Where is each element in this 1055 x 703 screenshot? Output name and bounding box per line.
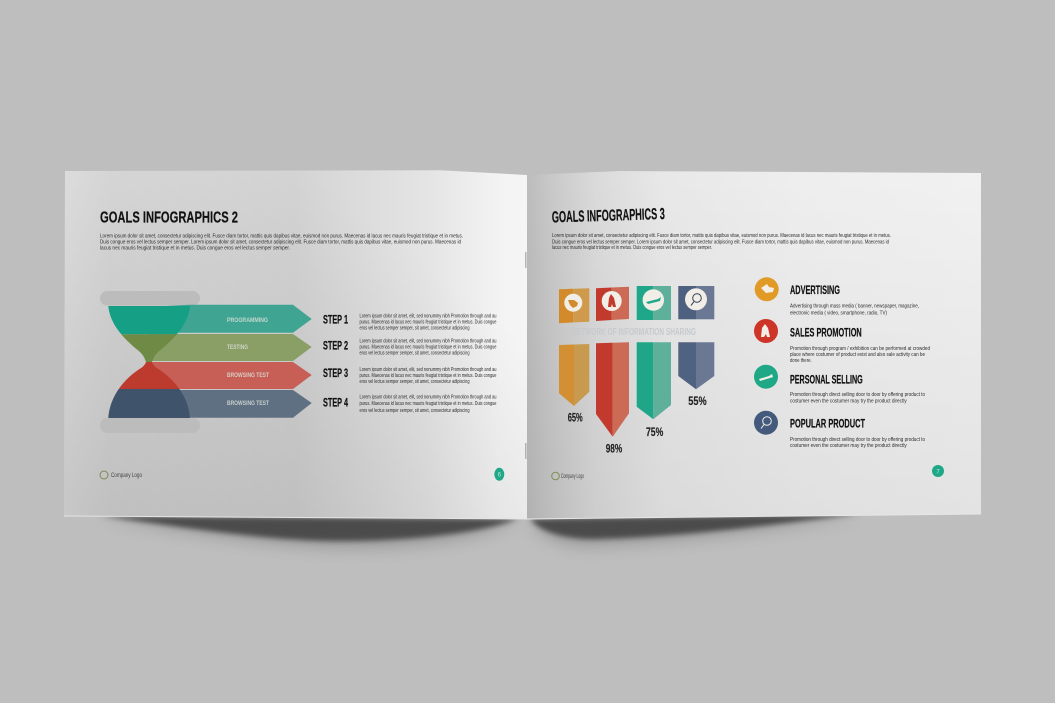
list: personal selling: costumer even the costumer may try the product directly [790, 399, 907, 405]
ribbon 75% green: 75% [646, 427, 663, 439]
step 2: Lorem ipsum dolor sit amet, elit, sed nonummy nibh Promotion through and au [360, 338, 496, 344]
step 3 [323, 367, 496, 385]
list: sales promotion: done there. [790, 358, 812, 364]
list: personal selling: PERSONAL SELLING [790, 374, 863, 386]
chart: hourglass with arrows [100, 291, 312, 433]
intro text [100, 234, 463, 252]
intro text: Lorem ipsum dolor sit amet, consectetur adipiscing elit. Fusce diam tortor, mattis quis dapibus vitae, euismod non purus. Maecenas id lacus nec mauris feugiat tristique et in metus. [100, 234, 463, 240]
step 1 [323, 314, 496, 332]
left page sheet [64, 170, 527, 519]
heading: goals infographics 2: GOALS INFOGRAPHICS 2 [100, 210, 238, 227]
icon: advertising [755, 277, 779, 301]
list: sales promotion [754, 319, 930, 364]
step 3: STEP 3 [323, 368, 348, 380]
icon: popular product [754, 411, 778, 435]
page number 6: 6 [498, 472, 502, 478]
arrow: browsing test red: BROWSING TEST [227, 372, 269, 379]
intro text [552, 233, 891, 251]
step 4: Lorem ipsum dolor sit amet, elit, sed nonummy nibh Promotion through and au [360, 394, 496, 400]
panel: left page [64, 170, 527, 519]
hourglass bottom cap [100, 418, 200, 433]
list: personal selling [754, 365, 925, 405]
company logo right: Company Logo [561, 474, 584, 480]
page number 6 [494, 468, 504, 481]
page shadows [100, 514, 860, 548]
step 2 [323, 338, 496, 356]
intro text: Duis congue eros vel lectus semper semper. Lorem ipsum dolor sit amet, consectetur adipiscing elit. Fusce diam tortor, mattis quis dapibus vitae, euismod non purus. Maecenas id [552, 240, 889, 246]
step 3: eros vel lectus semper semper, sit amet, consectetur adipiscing [360, 379, 470, 385]
ribbon 98% red: 98% [606, 443, 622, 455]
step 4 [323, 394, 496, 414]
page number 7: 7 [936, 470, 940, 476]
arrow: programming [149, 305, 312, 333]
step 4: STEP 4 [323, 398, 348, 410]
list: sales promotion: place where costumer of product exist and also sale activity can be [790, 352, 925, 358]
ribbon 55% blue [678, 342, 714, 408]
page number 7 [932, 465, 944, 477]
intro text: lacus nec mauris feugiat tristique et in metus. Duis congue eros vel lectus semper semper. [100, 246, 290, 252]
step 2: STEP 2 [323, 340, 348, 352]
arrow: testing: TESTING [227, 344, 248, 351]
list: advertising [755, 277, 919, 317]
list: personal selling: Promotion through direct selling door to door by offering product to [790, 392, 925, 398]
icon tile orange [559, 288, 589, 323]
panel: right page [525, 171, 981, 519]
step 3: Lorem ipsum dolor sit amet, elit, sed nonummy nibh Promotion through and au [360, 367, 496, 373]
icon tile blue [678, 286, 714, 319]
step 2: eros vel lectus semper semper, sit amet, consectetur adipiscing [360, 350, 470, 356]
intro text: Duis congue eros vel lectus semper semper. Lorem ipsum dolor sit amet, consectetur adipiscing elit. Fusce diam tortor, mattis quis dapibus vitae, euismod non purus. Maecenas id [100, 240, 461, 246]
arrow: browsing test red [149, 362, 312, 389]
hourglass body [108, 306, 190, 418]
list: sales promotion: Promotion through program / exhibition can be performed at crowded [790, 346, 930, 352]
list: popular product: costumer even the costumer may try the product directly [790, 443, 907, 449]
network caption: NETWORK OF INFORMATION SHARING [572, 326, 696, 338]
step 4: purus. Maecenas id lacus nec mauris feugiat tristique et in metus. Duis congue [360, 401, 496, 407]
company logo left [100, 471, 142, 479]
ribbon 98% red [596, 342, 629, 455]
arrow: browsing test blue: BROWSING TEST [227, 400, 269, 407]
list: popular product [754, 411, 925, 449]
list: popular product: POPULAR PRODUCT [790, 419, 865, 431]
arrow: browsing test blue [149, 390, 312, 418]
icon tile red [596, 287, 629, 321]
company logo right [552, 472, 584, 480]
step 3: purus. Maecenas id lacus nec mauris feugiat tristique et in metus. Duis congue [360, 373, 496, 379]
company logo left: Company Logo [111, 473, 142, 479]
spine staple marks [525, 252, 526, 459]
list: sales promotion: SALES PROMOTION [790, 328, 862, 340]
hourglass top cap [100, 291, 200, 306]
arrow: programming: PROGRAMMING [227, 317, 268, 324]
icon: personal selling [754, 365, 778, 389]
step 1: Lorem ipsum dolor sit amet, elit, sed nonummy nibh Promotion through and au [360, 314, 496, 320]
list: advertising: ADVERTISING [790, 285, 840, 297]
step 1: purus. Maecenas id lacus nec mauris feugiat tristique et in metus. Duis congue [360, 320, 496, 326]
step labels and descriptions [323, 314, 496, 414]
heading: goals infographics 3: GOALS INFOGRAPHICS 3 [552, 206, 665, 226]
arrow: testing [149, 334, 312, 361]
icon tile green [637, 286, 671, 320]
step 4: eros vel lectus semper semper, sit amet, consectetur adipiscing [360, 408, 470, 414]
step 2: purus. Maecenas id lacus nec mauris feugiat tristique et in metus. Duis congue [360, 344, 496, 350]
step 1: eros vel lectus semper semper, sit amet, consectetur adipiscing [360, 326, 470, 332]
intro text: lacus nec mauris feugiat tristique et in metus. Duis congue eros vel lectus semper semper. [552, 245, 712, 251]
icon: sales promotion [754, 319, 778, 343]
step 1: STEP 1 [323, 314, 348, 326]
intro text: Lorem ipsum dolor sit amet, consectetur adipiscing elit. Fusce diam tortor, mattis quis dapibus vitae, euismod non purus. Maecenas id lacus nec mauris feugiat tristique et in metus. [552, 233, 891, 239]
ribbon 65% orange: 65% [568, 413, 583, 425]
ribbon 55% blue: 55% [688, 396, 707, 408]
ribbon 75% green [637, 342, 671, 439]
chart: network of information sharing [559, 286, 714, 455]
right page sheet [527, 171, 981, 519]
list: advertising: Advertising through mass media ( banner, newspaper, magazine, [790, 304, 919, 310]
ribbon 65% orange [559, 344, 589, 425]
list: popular product: Promotion through direct selling door to door by offering product to [790, 437, 925, 443]
list: advertising: electronic media ( video, smartphone, radio, TV) [790, 311, 887, 317]
